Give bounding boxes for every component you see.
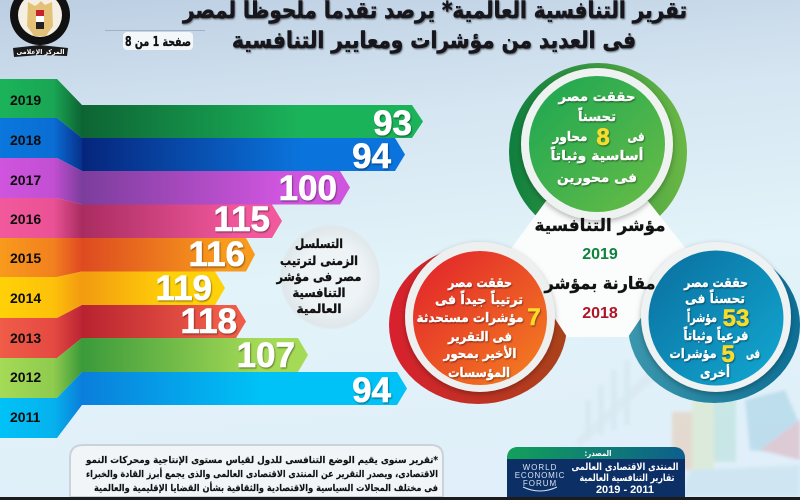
side circle: timeline caption: مصر فى مؤشر	[276, 269, 362, 284]
centre heading text: 2018	[582, 305, 618, 322]
panel: green circle: محاور	[552, 130, 588, 145]
banner: المركز الإعلامى	[16, 48, 64, 56]
bar 2013: 118: 118	[181, 302, 237, 341]
panel: green circle: فى محورين	[557, 171, 637, 186]
source panel: المصدر:	[584, 449, 612, 458]
source panel: المنتدى الاقتصادى العالمى	[572, 462, 678, 473]
page number pill: صفحة 1 من 8	[125, 35, 191, 50]
bar 2016: 115: 2016	[10, 211, 41, 227]
source panel	[507, 447, 685, 497]
source panel: تقارير التنافسية العالمية	[580, 473, 675, 484]
bar 2018: 94: 94	[352, 137, 392, 176]
bar 2011: 94: 94	[352, 371, 392, 410]
panel: blue circle: فرعياً وثباتاً	[683, 326, 748, 344]
bar 2016: 115	[0, 198, 282, 239]
panel: blue circle: حققت مصر	[683, 276, 748, 291]
source panel: 2019 - 2011	[596, 484, 654, 496]
bar 2015: 116: 116	[189, 235, 245, 274]
footnote box: *تقرير سنوى يقيم الوضع التنافسى للدول لقياس مستوى الإنتاجية ومحركات النمو	[85, 455, 438, 466]
bar 2017: 100: 100	[279, 169, 337, 208]
panel: blue circle: مؤشرات	[670, 347, 716, 362]
footnote box: فى مختلف المجالات السياسية والاقتصادية والثقافية بشأن القضايا الإقليمية والعالمية	[94, 481, 438, 494]
WEF logo	[515, 463, 565, 491]
WEF logo: ECONOMIC	[515, 471, 565, 480]
bottom strip	[0, 497, 800, 500]
WEF logo: FORUM	[523, 479, 557, 488]
bar 2019: 93: 2019	[10, 92, 41, 108]
bar 2013: 118: 2013	[10, 330, 41, 346]
icon: eagle	[27, 1, 53, 36]
panel: red circle: ترتيباً جيداً فى	[435, 290, 523, 308]
centre heading text	[534, 216, 666, 322]
bar 2013: 118	[0, 302, 246, 358]
panel: blue circle: 5	[721, 341, 735, 368]
bar 2011: 94: 2011	[10, 409, 41, 425]
bar 2018: 94	[0, 118, 405, 176]
centre heading text: 2019	[582, 246, 618, 263]
bar 2014: 119: 2014	[10, 290, 41, 306]
bar 2012: 107: 2012	[10, 369, 41, 385]
centre heading text: مؤشر التنافسية	[534, 216, 666, 236]
title: فى العديد من مؤشرات ومعايير التنافسية	[232, 28, 636, 54]
panel: green circle: تحسناً	[578, 107, 616, 125]
centre heading text: مقارنة بمؤشر	[544, 274, 656, 294]
background illustration: faint charts	[575, 360, 800, 497]
panel: red circle: فى التقرير	[447, 330, 512, 345]
panel: blue circle: مؤشراً	[687, 308, 717, 326]
panel: red circle	[405, 242, 555, 392]
panel: centre hexagon	[510, 201, 687, 337]
ribbon chart: ranking by year	[0, 79, 423, 438]
panel: red circle: حققت مصر	[447, 276, 512, 291]
panel: red circle: 7	[527, 304, 541, 331]
logo: media centre emblem	[10, 0, 70, 57]
panel: blue circle: فى	[746, 347, 760, 362]
bar 2019: 93: 93	[373, 104, 412, 143]
panel: outer rings	[389, 63, 800, 404]
panel: blue circle: أخرى	[700, 364, 730, 381]
panel: red circle: الأخير بمحور	[443, 345, 516, 362]
bar 2011: 94	[0, 371, 407, 438]
page number pill	[105, 30, 205, 50]
bar 2015: 116: 2015	[10, 250, 41, 266]
panel: blue circle: 53	[723, 305, 749, 332]
WEF logo: WORLD	[523, 463, 557, 472]
footnote box	[70, 445, 443, 497]
title	[182, 0, 687, 54]
panel: green circle: أساسية وثباتاً	[550, 146, 644, 164]
panel: green circle: 8	[596, 124, 610, 151]
panel: blue circle	[641, 242, 791, 392]
footnote box: الاقتصادى، ويصدر التقرير عن المنتدى الاقتصادى العالمى والذى يجمع أبرز القادة والخبراء	[86, 467, 438, 480]
side circle: timeline caption: التسلسل	[295, 236, 343, 251]
bar 2017: 100	[0, 158, 350, 208]
panel: green circle	[521, 68, 673, 220]
side circle: timeline caption: العالمية	[296, 301, 342, 316]
side circle: timeline caption: الزمنى لترتيب	[280, 253, 358, 268]
side circle: timeline caption: التنافسية	[292, 285, 346, 300]
bar 2019: 93	[0, 79, 423, 143]
bar 2016: 115: 115	[214, 200, 270, 239]
panel: blue circle: تحسناً فى	[685, 289, 745, 307]
bar 2017: 100: 2017	[10, 172, 41, 188]
panel: green circle: فى	[628, 130, 644, 145]
panel: red circle: مؤشرات مستحدثة	[416, 311, 524, 326]
bar 2012: 107: 107	[237, 336, 295, 375]
panel: red circle: المؤسسات	[448, 366, 510, 381]
bar 2012: 107	[0, 336, 308, 398]
panel: green circle: حققت مصر	[557, 90, 636, 105]
bar 2014: 119	[0, 269, 225, 318]
side circle: timeline caption	[274, 224, 380, 330]
bar 2015: 116	[0, 235, 255, 277]
bar 2018: 94: 2018	[10, 132, 41, 148]
bar 2014: 119: 119	[156, 269, 212, 308]
